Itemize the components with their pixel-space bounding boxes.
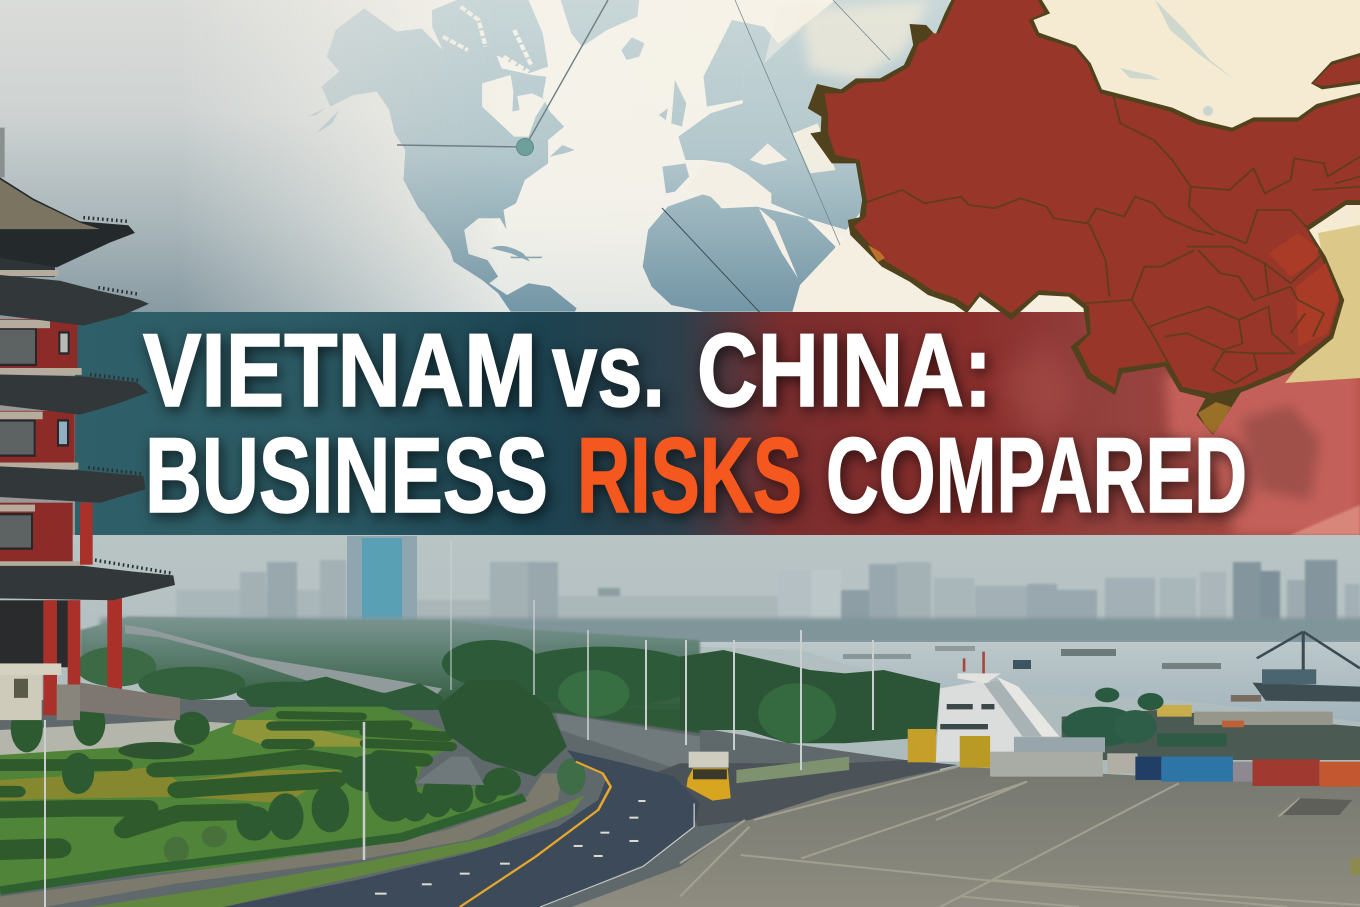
pagoda: stone lintels xyxy=(0,270,83,568)
pagoda: base annex xyxy=(0,663,180,720)
pagoda: red columns xyxy=(43,503,122,715)
tree clumps xyxy=(76,640,705,717)
right-hand verge shrubs xyxy=(557,758,586,795)
hedges xyxy=(0,715,451,850)
yellow-green lawn patch xyxy=(232,720,371,747)
pagoda: tiered roofs xyxy=(0,177,175,600)
big tree xyxy=(437,680,567,777)
china: province borders xyxy=(863,95,1360,387)
cargo ship xyxy=(1231,632,1360,702)
park stone wall xyxy=(0,720,232,755)
yellow utility vehicle xyxy=(687,752,731,801)
pagoda: top wall under roof xyxy=(0,250,55,277)
paved inner path xyxy=(415,757,484,785)
map: pale wash over central asia xyxy=(800,0,930,80)
map: china xyxy=(808,0,1360,435)
map: salmon land inside banner xyxy=(1000,340,1360,535)
title: two-line headline: BUSINESS xyxy=(145,415,548,535)
hedge bush xyxy=(118,742,194,759)
distant treeline xyxy=(100,618,1360,644)
upper service road xyxy=(556,713,700,767)
distant barges xyxy=(843,646,1221,669)
china: dark outline xyxy=(808,0,1360,435)
map: europe, africa and asia xyxy=(643,0,950,312)
dock area xyxy=(1062,688,1360,760)
pagoda: windows xyxy=(0,329,69,549)
skyline: right towers xyxy=(779,560,1360,630)
panel: world map background xyxy=(0,0,1360,320)
map: node marker xyxy=(516,138,534,156)
title: two-line headline xyxy=(143,311,1247,535)
panel: beige asia map xyxy=(955,0,1360,130)
lawn edge hedge xyxy=(0,797,525,891)
map: golden neighbouring land xyxy=(1285,225,1360,383)
title: two-line headline: vs. xyxy=(552,311,665,429)
street lamps xyxy=(45,540,873,907)
china: himalaya ochre fleck xyxy=(868,245,885,262)
china: red territory xyxy=(824,0,1360,393)
paved plaza and port road xyxy=(572,757,1360,907)
pagoda: lower dark hall xyxy=(0,600,80,667)
plaza markings xyxy=(680,767,1360,907)
port access asphalt xyxy=(654,760,958,827)
skyline: left distant towers xyxy=(176,560,778,638)
sky haze on left xyxy=(0,0,520,320)
photo: waterfront city xyxy=(0,535,1360,907)
map: ocean shading xyxy=(0,0,800,320)
ground base under roads xyxy=(0,700,940,907)
distant highway xyxy=(125,625,442,694)
footpath xyxy=(0,773,562,907)
china: hainan island xyxy=(1198,402,1231,434)
shipping containers xyxy=(908,729,1360,787)
road centre line xyxy=(460,762,611,907)
pagoda: red walls xyxy=(0,319,77,564)
map: lake baikal xyxy=(1120,0,1235,80)
road edge lines xyxy=(540,803,694,907)
pagoda xyxy=(0,128,180,720)
curved road xyxy=(223,750,700,907)
small trees xyxy=(11,701,521,863)
pagoda: roof ridge ornaments xyxy=(83,218,173,573)
olive lawn patch xyxy=(0,767,339,803)
tree mass below highway xyxy=(241,677,446,710)
dark plaza patch xyxy=(1283,798,1352,815)
plaza surface xyxy=(572,767,1360,907)
white terminal building xyxy=(936,652,1059,762)
map: north and south america xyxy=(307,0,645,312)
title: two-line headline: RISKS xyxy=(577,415,802,535)
waterside trees and road, drawn in park coordinates xyxy=(76,617,705,767)
river water xyxy=(530,642,1360,722)
skyline: blue glass tower xyxy=(347,536,417,628)
far tree band xyxy=(80,617,700,733)
tree mass by port xyxy=(680,650,940,743)
title: two-line headline: CHINA: xyxy=(697,313,992,429)
title: two-line headline: VIETNAM xyxy=(143,313,537,429)
road lane dashes xyxy=(375,800,645,895)
lawn base xyxy=(0,707,525,887)
small yellow-green block xyxy=(1350,858,1360,875)
china: shandong and jiangsu provinces xyxy=(1268,233,1339,347)
panel: title banner xyxy=(75,312,1360,535)
roadside fence xyxy=(736,757,849,783)
pagoda: finial xyxy=(0,128,5,177)
port and ship, drawn in port coordinates xyxy=(680,632,1360,801)
map: connection lines xyxy=(397,0,890,318)
grass verge xyxy=(89,795,585,907)
map: cream indian ocean region xyxy=(790,233,1000,320)
green park xyxy=(0,680,700,907)
